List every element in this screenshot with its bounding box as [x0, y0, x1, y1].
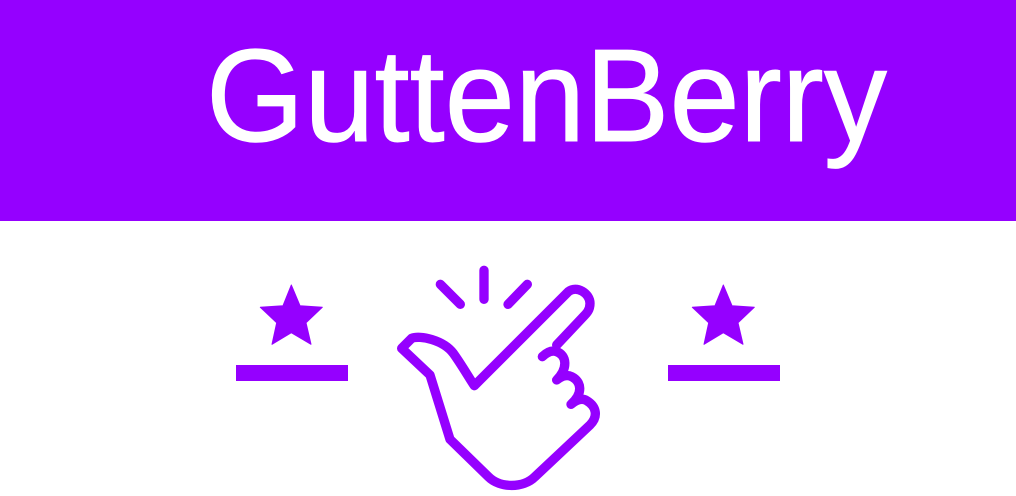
icon: snap spark lines [440, 270, 527, 304]
icon: left star with bar [236, 285, 348, 381]
icon: right star with bar [668, 285, 780, 381]
title: GuttenBerry: GuttenBerry [206, 22, 887, 169]
icon: snapping fingers hand [402, 270, 595, 485]
icon: hand outline [402, 289, 595, 485]
